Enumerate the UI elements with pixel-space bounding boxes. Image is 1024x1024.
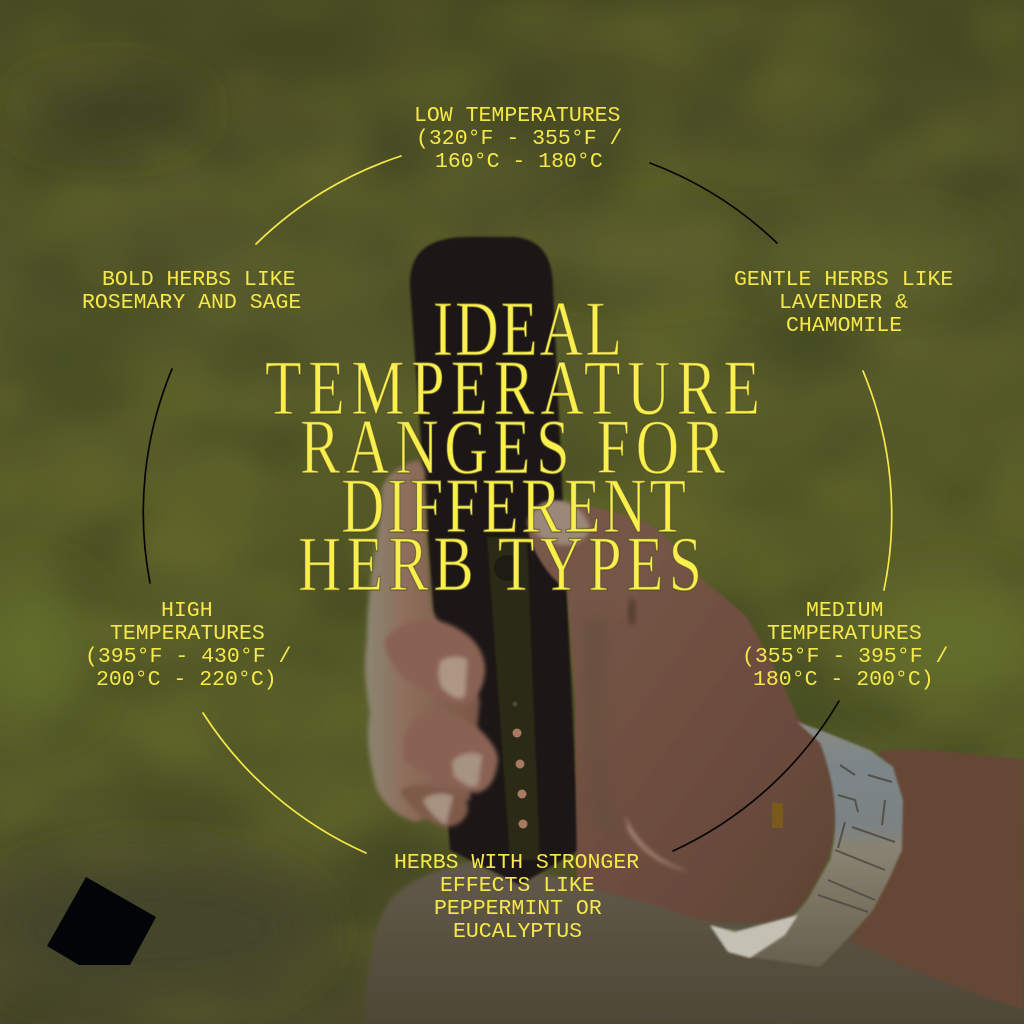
ring of arcs	[143, 156, 892, 853]
label: bold herbs	[82, 268, 301, 315]
label: stronger herbs: EFFECTS LIKE	[440, 874, 595, 898]
label: high temperatures: (395°F - 430°F /	[85, 645, 291, 669]
label: gentle herbs: GENTLE HERBS LIKE	[734, 268, 953, 292]
label: high temperatures: 200°C - 220°C)	[96, 668, 277, 692]
label: stronger herbs: EUCALYPTUS	[453, 920, 582, 944]
title: HERB TYPES	[298, 522, 702, 608]
label: high temperatures	[85, 599, 291, 692]
photo: wrist watch	[710, 722, 903, 967]
label: bold herbs: ROSEMARY AND SAGE	[82, 291, 301, 315]
label: low temperatures: LOW TEMPERATURES	[414, 104, 620, 128]
title: RANGES FOR	[300, 405, 725, 491]
label: medium temperatures: (355°F - 395°F /	[742, 645, 948, 669]
label: medium temperatures: 180°C - 200°C)	[753, 668, 934, 692]
label: high temperatures: HIGH	[161, 599, 213, 623]
label: low temperatures: (320°F - 355°F /	[416, 127, 622, 151]
photo: fingers	[385, 619, 498, 827]
black polygon shape	[47, 877, 156, 965]
label: gentle herbs: LAVENDER &	[779, 291, 908, 315]
photo: shirt	[365, 862, 1024, 1024]
small ochre rectangle	[772, 803, 783, 828]
label: low temperatures: 160°C - 180°C	[435, 150, 603, 174]
photo: forearm	[850, 750, 1024, 1010]
label: high temperatures: TEMPERATURES	[110, 622, 265, 646]
title: TEMPERATURE	[265, 346, 760, 432]
label: low temperatures	[414, 104, 622, 174]
title: DIFFERENT	[341, 464, 686, 550]
photo: palm and thumb	[528, 501, 838, 923]
photo: left side of hand	[365, 460, 480, 822]
label: gentle herbs: CHAMOMILE	[786, 314, 902, 338]
photo: vape device	[410, 237, 579, 885]
title	[265, 287, 760, 608]
title: IDEAL	[433, 287, 622, 373]
label: stronger herbs: HERBS WITH STRONGER	[394, 851, 639, 875]
label: gentle herbs	[734, 268, 953, 338]
label: bold herbs: BOLD HERBS LIKE	[102, 268, 296, 292]
label: medium temperatures: MEDIUM	[806, 599, 883, 623]
label: stronger herbs	[394, 851, 639, 944]
label: medium temperatures	[742, 599, 948, 692]
label: stronger herbs: PEPPERMINT OR	[434, 897, 602, 921]
label: medium temperatures: TEMPERATURES	[767, 622, 922, 646]
